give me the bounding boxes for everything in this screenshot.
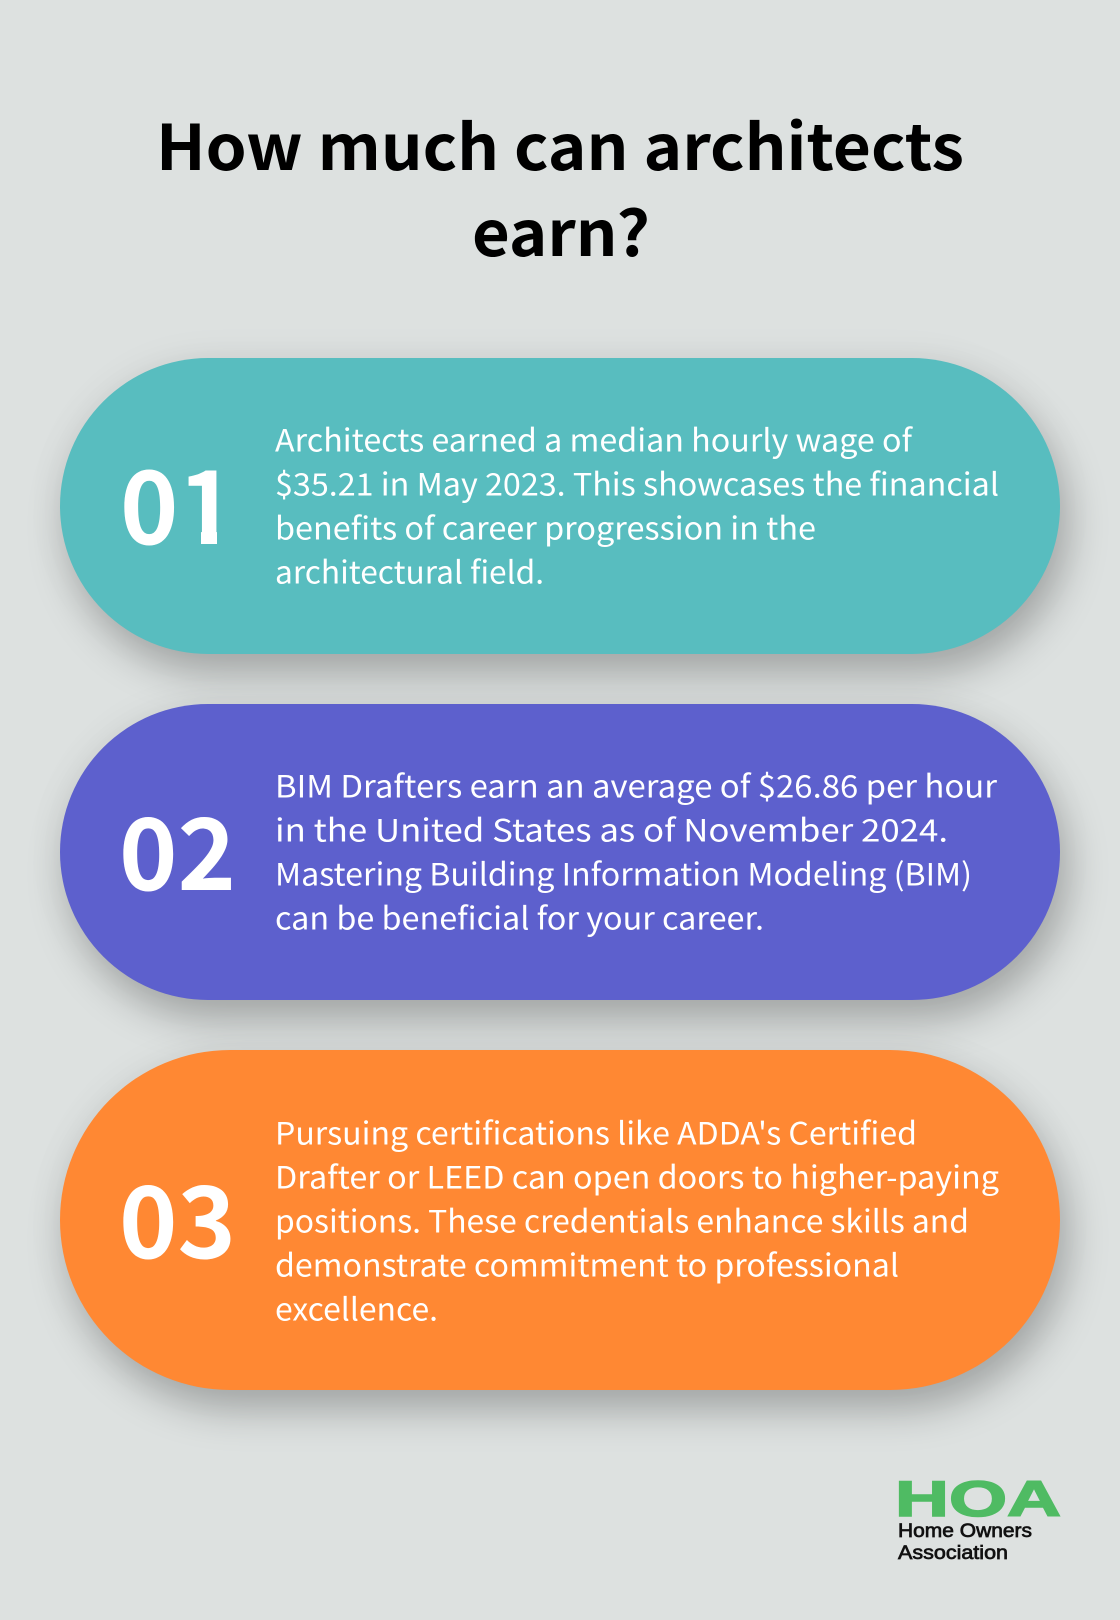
logo: HOA Home Owners Association: HOA bbox=[895, 1471, 1061, 1527]
text: step 01 description bbox=[275, 416, 999, 592]
text: step 02 description: can be beneficial for your career. bbox=[275, 894, 764, 938]
text: step 01 description: benefits of career progression in the bbox=[275, 504, 816, 548]
title: How much can architects bbox=[156, 98, 964, 189]
text: step 02 description: Mastering Building Information Modeling (BIM) bbox=[275, 850, 972, 894]
text: step 01 description: $35.21 in May 2023. This showcases the financial bbox=[275, 460, 999, 504]
text: step 02 description: BIM Drafters earn an average of $26.86 per hour bbox=[275, 762, 998, 806]
text: step 03 description bbox=[275, 1108, 1000, 1330]
title: earn? bbox=[472, 184, 650, 275]
text: step 03 description: Pursuing certifications like ADDA's Certified bbox=[275, 1108, 917, 1154]
number 03: 03 bbox=[119, 1143, 236, 1287]
text: step 02 description bbox=[275, 762, 998, 938]
panel: step 02 bbox=[60, 704, 1060, 1000]
text: step 02 description: in the United States as of November 2024. bbox=[275, 806, 948, 850]
number 02: 02 bbox=[119, 775, 236, 919]
text: step 01 description: Architects earned a median hourly wage of bbox=[275, 416, 914, 460]
text: step 03 description: positions. These credentials enhance skills and bbox=[275, 1196, 969, 1242]
text: step 03 description: demonstrate commitment to professional bbox=[275, 1240, 899, 1286]
panel: step 03 bbox=[60, 1050, 1060, 1390]
panel: step 01 bbox=[60, 358, 1060, 654]
text: step 01 description: architectural field. bbox=[275, 548, 544, 592]
text: step 03 description: excellence. bbox=[275, 1284, 438, 1330]
number 01: 01 bbox=[120, 429, 236, 573]
title bbox=[156, 98, 964, 275]
logo: HOA Home Owners Association: Home Owners bbox=[898, 1521, 1032, 1542]
text: step 03 description: Drafter or LEED can open doors to higher-paying bbox=[275, 1152, 1000, 1198]
logo: HOA Home Owners Association: Association bbox=[898, 1543, 1008, 1564]
